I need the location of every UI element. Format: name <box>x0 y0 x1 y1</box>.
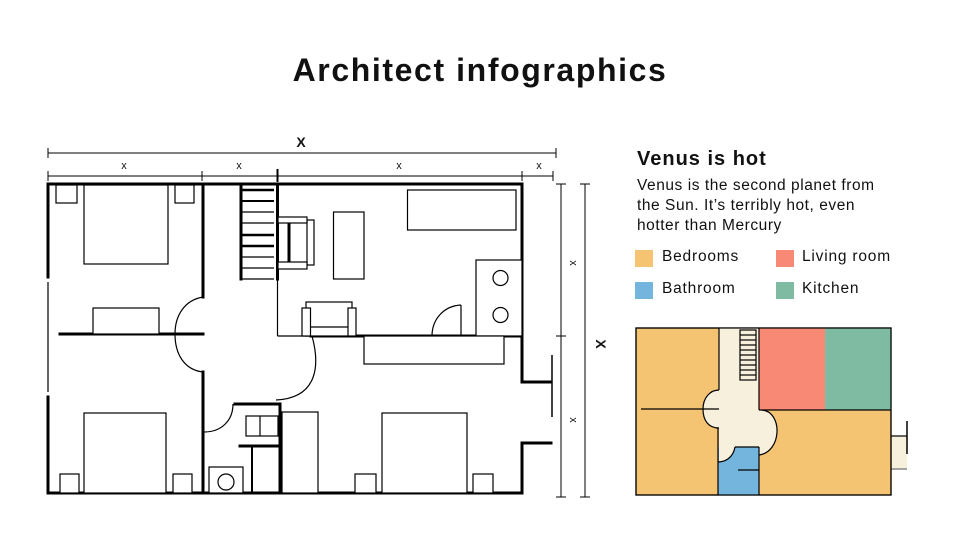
text block: hotter than Mercury <box>637 217 782 234</box>
beds & nightstands <box>56 185 77 203</box>
legend: bathroom <box>635 280 736 299</box>
stairs <box>241 190 274 279</box>
legend: kitchen: Kitchen <box>802 280 859 297</box>
legend <box>635 248 891 299</box>
dimension labels: x <box>567 417 579 423</box>
door arcs <box>175 297 461 432</box>
dimension labels <box>121 134 609 423</box>
dimension labels: X <box>296 134 306 150</box>
text block <box>637 177 875 234</box>
legend: living room: Living room <box>802 248 891 265</box>
dimension labels: x <box>567 260 579 266</box>
thin lines, furniture <box>48 185 552 493</box>
legend: kitchen <box>776 280 859 299</box>
legend: bathroom: Bathroom <box>662 280 736 297</box>
title: Architect infographics <box>293 52 667 88</box>
dimension labels: x <box>536 160 542 172</box>
text block: Venus is the second planet from <box>637 177 875 194</box>
walls <box>48 184 551 493</box>
legend: bedrooms <box>635 248 739 267</box>
dimension labels: x <box>396 160 402 172</box>
dimension labels: x <box>236 160 242 172</box>
colored minimap <box>635 327 908 496</box>
dimension labels: X <box>593 339 609 349</box>
legend: living room <box>776 248 891 267</box>
dimension labels: x <box>121 160 127 172</box>
dimension lines <box>48 148 590 497</box>
legend: bedrooms: Bedrooms <box>662 248 739 265</box>
heading: Venus is hot: Venus is hot <box>637 148 767 170</box>
living furniture <box>307 220 314 265</box>
text block: the Sun. It’s terribly hot, even <box>637 197 855 214</box>
